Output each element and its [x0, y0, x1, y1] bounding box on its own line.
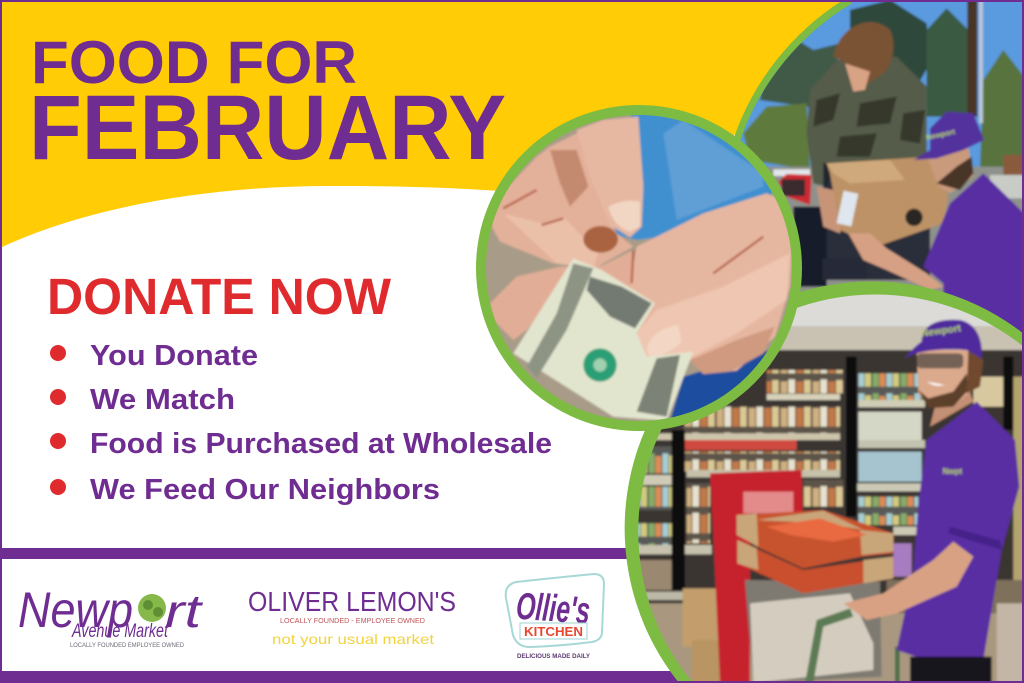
title: [29, 29, 506, 179]
title: FOOD FOR: [31, 29, 357, 96]
list of donation steps: We Match: [90, 384, 235, 416]
logo: Oliver Lemon's: OLIVER LEMON'S: [248, 586, 456, 617]
title: FEBRUARY: [29, 77, 506, 179]
logo: Oliver Lemon's: not your usual market: [272, 631, 434, 647]
logo: Newport Avenue Market: [18, 582, 204, 649]
icon: artichoke: [138, 594, 166, 622]
logo: Ollie's Kitchen: Ollie's: [515, 586, 591, 633]
logo: Newport Avenue Market: Newp: [18, 582, 133, 638]
logo: Ollie's Kitchen: [506, 574, 604, 660]
photo: employee with grocery cart in store: [624, 281, 1022, 683]
logo: Ollie's Kitchen: DELICIOUS MADE DAILY: [517, 653, 591, 660]
heading: donate now: DONATE NOW: [47, 268, 392, 325]
list of donation steps: You Donate: [90, 340, 258, 372]
list of donation steps: We Feed Our Neighbors: [90, 474, 440, 506]
list of donation steps: Food is Purchased at Wholesale: [90, 428, 552, 460]
logo: Ollie's Kitchen: KITCHEN: [524, 624, 583, 639]
photo: employee with grocery cart in store: Nwpt: [943, 467, 963, 476]
photo: employee with grocery cart in store: Newport: [921, 323, 962, 340]
photo: loading a donation box outdoors: [734, 2, 1022, 332]
logo: Newport Avenue Market: Avenue Market: [71, 621, 169, 642]
photo: hands with a dollar bill and penny: [476, 105, 802, 431]
logo: Newport Avenue Market: rt: [165, 585, 204, 637]
logo: Newport Avenue Market: LOCALLY FOUNDED EMPLOYEE OWNED: [70, 643, 185, 649]
photo: loading a donation box outdoors: Newport: [925, 127, 956, 142]
logo: Oliver Lemon's: [248, 586, 456, 647]
logo: Oliver Lemon's: LOCALLY FOUNDED - EMPLOYEE OWNED: [280, 618, 425, 625]
list of donation steps: [50, 340, 552, 506]
panel: bottom logo band: [0, 548, 700, 683]
yellow header shape: [0, 0, 850, 248]
